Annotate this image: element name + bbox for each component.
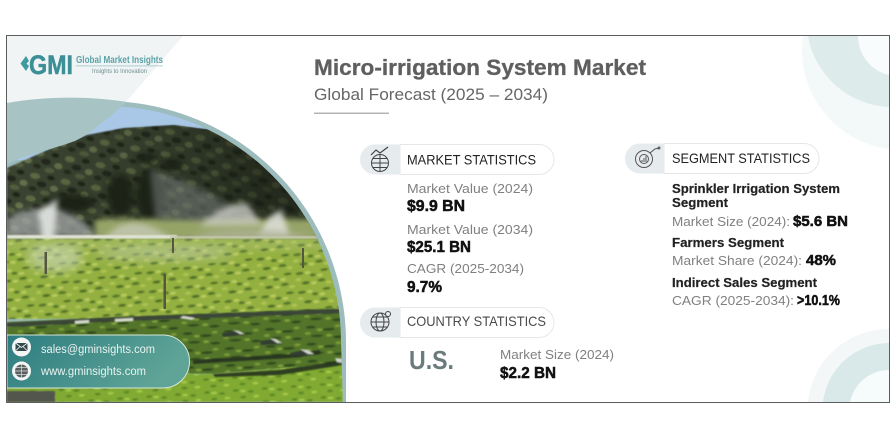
icon: logo diamonds: [20, 56, 29, 71]
stat: US market size: $2.2 BN: [500, 365, 556, 382]
panel: irrigation field photo: [7, 100, 347, 402]
subtitle: Global Forecast (2025 – 2034): [314, 85, 548, 104]
heading: market statistics: [360, 144, 554, 174]
stat: indirect sales segment: >10.1%: [797, 293, 840, 309]
icon: chart over globe: [371, 147, 388, 172]
stat: indirect sales segment: [672, 275, 840, 309]
water sprays: [7, 170, 315, 238]
irrigation stripes: [7, 309, 343, 402]
grass strip behind sprays: [95, 219, 330, 239]
panel: market statistics: [360, 144, 554, 296]
decorative ring: bottom right: [808, 329, 889, 402]
title: Micro-irrigation System Market: [314, 55, 647, 80]
forest: [7, 125, 347, 240]
spray jet: [38, 198, 58, 258]
stat: farmers segment: 48%: [806, 253, 836, 269]
icon: website globe: [12, 362, 31, 380]
stat: US market size: [500, 347, 614, 382]
spray haze over crops: [7, 241, 337, 272]
contact email: sales@gminsights.com: [41, 344, 155, 356]
stat: sprinkler segment: Sprinkler Irrigation System: [672, 181, 840, 196]
photo ring: [7, 101, 346, 402]
stat: market value 2024: Market Value (2024): [407, 181, 533, 196]
stat: sprinkler segment: $5.6 BN: [793, 214, 848, 230]
callout: contact pill: [7, 335, 190, 388]
stat: market value 2024: $9.9 BN: [407, 198, 465, 215]
panel: segment statistics: [625, 144, 848, 309]
stat: sprinkler segment: Market Size (2024):: [672, 214, 790, 229]
heading: country statistics: [360, 308, 554, 338]
country name: U.S.: [409, 345, 454, 375]
stat: CAGR: CAGR (2025-2034): [407, 261, 524, 276]
heading: segment statistics: SEGMENT STATISTICS: [672, 150, 810, 166]
stat: CAGR: 9.7%: [407, 279, 442, 296]
heading: country statistics: COUNTRY STATISTICS: [407, 313, 546, 329]
stat: market value 2024: [407, 181, 533, 215]
icon: target chart: [636, 147, 660, 168]
stat: market value 2034: [407, 222, 533, 256]
stat: CAGR: [407, 261, 524, 296]
sprinkler posts: [44, 238, 304, 309]
bottom crop rows: [7, 363, 343, 402]
icon: globe: [371, 312, 390, 331]
stat: sprinkler segment: [672, 181, 848, 230]
stat: market value 2034: Market Value (2034): [407, 222, 533, 237]
horizon: [7, 235, 177, 239]
panel: logo backdrop: [7, 36, 183, 103]
stat: farmers segment: [672, 235, 836, 269]
contact website: www.gminsights.com: [40, 366, 146, 378]
icon: email: [12, 338, 31, 356]
logo tagline: Insights to Innovation: [92, 68, 147, 75]
decorative ring: top right: [802, 36, 889, 149]
upper crop rows: [7, 239, 347, 319]
heading: segment statistics: [625, 144, 819, 174]
stat: sprinkler segment: Segment: [672, 195, 729, 210]
teal corner shape: [7, 98, 127, 164]
logo letters: GMI: [29, 50, 73, 80]
sky: [16, 106, 240, 160]
stat: indirect sales segment: CAGR (2025-2034):: [672, 293, 794, 308]
stat: farmers segment: Market Share (2024):: [672, 253, 802, 268]
logo name: Global Market Insights: [76, 55, 163, 66]
logo: Global Market Insights: [20, 50, 163, 80]
stat: farmers segment: Farmers Segment: [672, 235, 785, 250]
forest shade: [26, 125, 318, 240]
stat: US market size: Market Size (2024): [500, 347, 614, 362]
panel: country statistics: [360, 308, 614, 382]
stat: indirect sales segment: Indirect Sales Segment: [672, 275, 818, 290]
lower crop rows: [7, 308, 343, 374]
forest dark clumps: [45, 153, 183, 221]
stat: market value 2034: $25.1 BN: [407, 239, 471, 256]
heading: market statistics: MARKET STATISTICS: [407, 152, 536, 168]
